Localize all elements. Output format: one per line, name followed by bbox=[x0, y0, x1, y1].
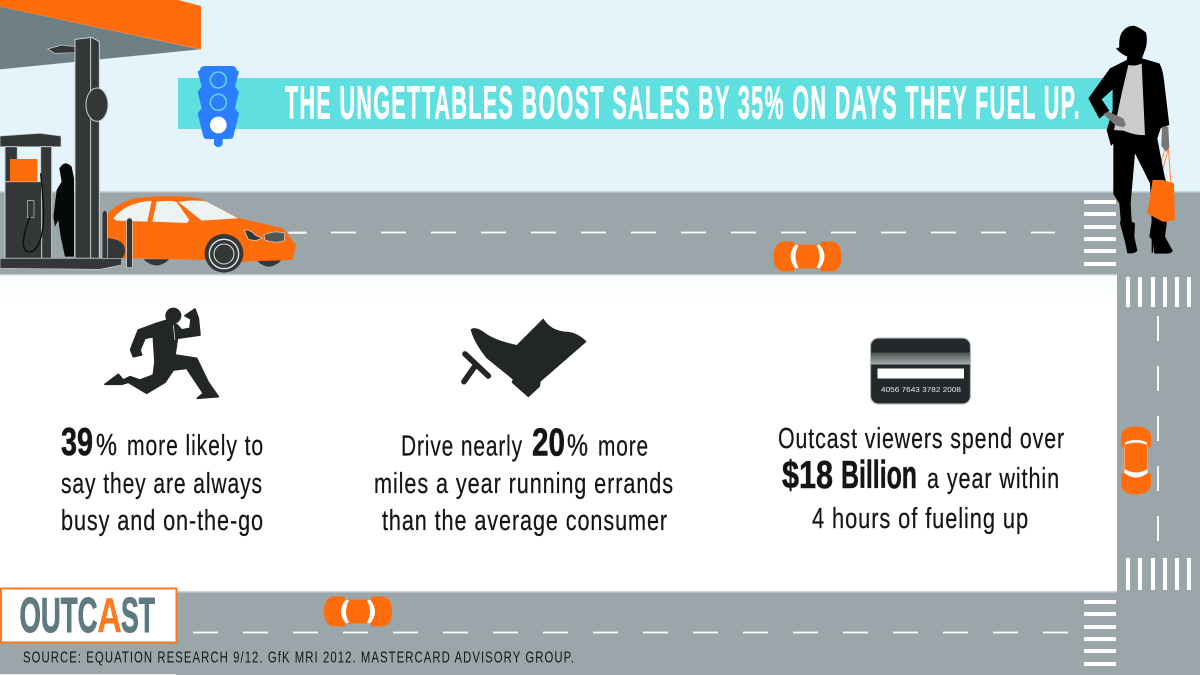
icon: boot on pedal bbox=[464, 318, 587, 397]
icon: traffic light bbox=[198, 66, 239, 147]
icon: credit card: 4056 7643 3782 2008 bbox=[881, 387, 961, 394]
fuel pump bbox=[5, 147, 52, 258]
car top view: top road bbox=[774, 242, 842, 272]
bag straps bbox=[1155, 147, 1171, 183]
sky background bbox=[0, 0, 1200, 192]
hands bbox=[1103, 112, 1169, 152]
top road bbox=[0, 191, 1200, 276]
text block: 20%: than the average consumer bbox=[382, 505, 668, 537]
text block: $18 Billion: 4 hours of fueling up bbox=[812, 503, 1029, 535]
gas station with car bbox=[0, 0, 307, 273]
woman silhouette at pump bbox=[53, 163, 74, 257]
text block: 20%: more bbox=[598, 430, 649, 462]
logo: Outcast: OUTC bbox=[20, 589, 97, 643]
pump roof bbox=[0, 133, 61, 147]
text block: 39% bbox=[61, 421, 264, 537]
text block: 20%: % bbox=[567, 428, 588, 462]
text block: $18 Billion: Outcast viewers spend over bbox=[778, 423, 1065, 455]
silhouette bbox=[1088, 26, 1173, 254]
orange car bbox=[107, 196, 307, 273]
text block: 39%: 39 bbox=[61, 421, 93, 464]
bollards bbox=[102, 210, 132, 268]
logo: Outcast: A bbox=[97, 589, 122, 643]
text block: 39%: more likely to bbox=[127, 430, 264, 462]
source line: SOURCE: EQUATION RESEARCH 9/12. GfK MRI 2012. MASTERCARD ADVISORY GROUP. bbox=[23, 650, 575, 666]
icon: running businessman bbox=[105, 308, 218, 398]
text block: 39%: busy and on-the-go bbox=[61, 505, 264, 537]
text block: $18 Billion: Billion bbox=[841, 454, 917, 497]
bag body bbox=[1147, 180, 1175, 222]
column bbox=[0, 37, 122, 269]
woman with shopping bag bbox=[1088, 26, 1175, 254]
car top view: bottom road bbox=[324, 596, 392, 626]
text block: 20%: Drive nearly bbox=[401, 430, 523, 462]
text block: $18 Billion: $18 bbox=[782, 454, 833, 497]
crosswalks bbox=[1084, 200, 1191, 666]
text block: $18 Billion: a year within bbox=[927, 463, 1060, 495]
bottom road bbox=[0, 591, 1200, 675]
icon: credit card bbox=[870, 338, 970, 404]
right road bbox=[1117, 275, 1200, 675]
text block: 39%: % bbox=[96, 427, 117, 462]
text block: 39%: say they are always bbox=[61, 468, 263, 500]
text block: 20%: miles a year running errands bbox=[374, 468, 674, 500]
shirt bbox=[1114, 63, 1145, 135]
text block: 20%: 20 bbox=[532, 422, 565, 464]
text block: $18 Billion bbox=[778, 423, 1065, 535]
text block: 20% bbox=[374, 422, 674, 537]
canopy bbox=[0, 0, 201, 69]
logo: Outcast: ST bbox=[121, 589, 155, 643]
car top view: right road bbox=[1121, 426, 1151, 494]
